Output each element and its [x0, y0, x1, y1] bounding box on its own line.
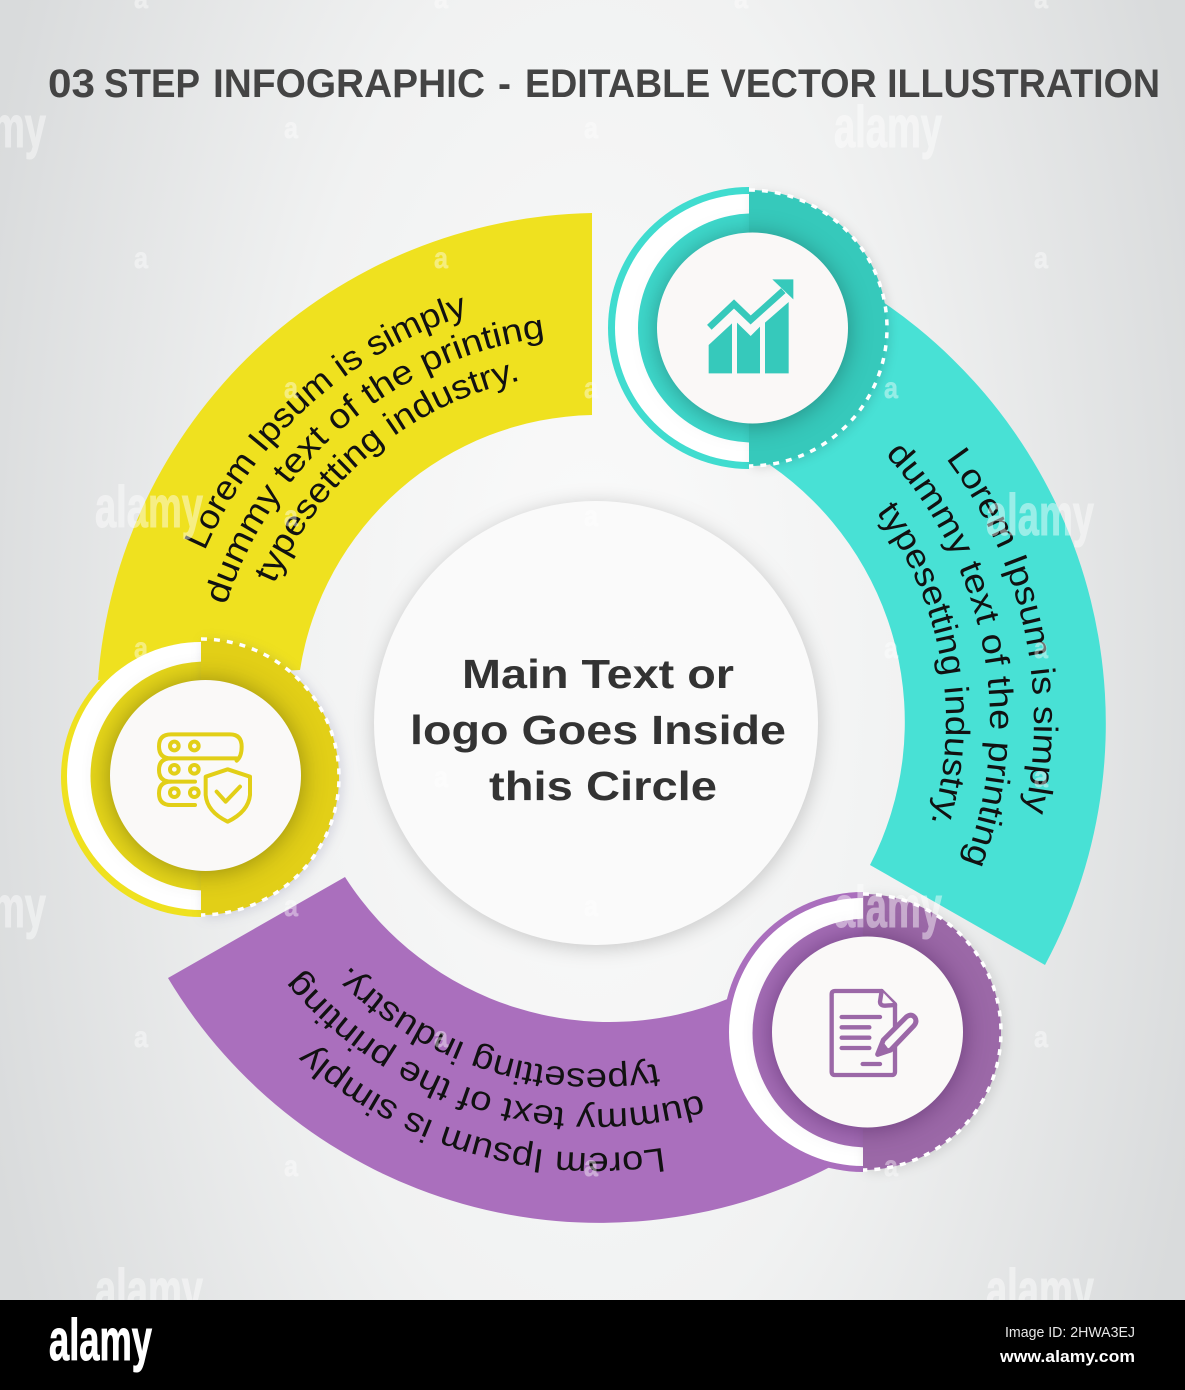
watermark grid: a	[884, 372, 898, 405]
title	[48, 62, 1160, 106]
panel: teal band: typesetting industry.	[877, 502, 970, 821]
watermark grid: a	[434, 1021, 448, 1054]
footer bar: Image ID: 2HWA3EJ	[1005, 1324, 1135, 1341]
watermark grid: a	[284, 372, 298, 405]
watermark grid: a	[1034, 761, 1048, 794]
watermark grid: alamy	[834, 875, 942, 940]
panel: yellow band: Lorem Ipsum is simply	[184, 298, 462, 548]
watermark grid: alamy	[95, 475, 203, 540]
panel: yellow band: dummy text of the printing	[208, 320, 543, 602]
panel: purple band: typesetting industry.	[342, 968, 660, 1088]
watermark grid: a	[584, 1150, 598, 1183]
watermark grid: a	[284, 890, 298, 923]
watermark grid: a	[134, 632, 148, 665]
watermark grid: a	[584, 500, 598, 533]
watermark grid: a	[884, 1150, 898, 1183]
watermark grid: alamy	[95, 1258, 203, 1323]
watermark grid: a	[584, 890, 598, 923]
watermark grid: a	[584, 112, 598, 145]
icon: server with shield	[159, 734, 250, 822]
watermark grid: a	[584, 372, 598, 405]
watermark grid: alamy	[834, 95, 942, 160]
title: INFOGRAPHIC	[213, 62, 485, 106]
watermark grid: a	[134, 1021, 148, 1054]
panel: purple band: dummy text of the printing	[288, 971, 703, 1130]
watermark grid: alamy	[540, 608, 648, 673]
panel: teal band: dummy text of the printing	[888, 446, 1014, 866]
title: STEP	[104, 62, 200, 106]
watermark grid: a	[1034, 632, 1048, 665]
badge: purple document icon	[723, 892, 1003, 1172]
watermark grid: a	[1034, 242, 1048, 275]
panel: yellow band	[98, 213, 592, 680]
panel: purple band	[168, 877, 829, 1223]
badge: yellow server icon	[61, 637, 341, 917]
panel: teal band: Lorem Ipsum is simply	[948, 447, 1058, 815]
watermark grid: a	[284, 112, 298, 145]
center circle: this Circle	[489, 763, 717, 809]
title: EDITABLE VECTOR ILLUSTRATION	[525, 62, 1160, 106]
watermark grid: a	[884, 632, 898, 665]
center circle: logo Goes Inside	[410, 707, 786, 753]
footer bar: www.alamy.com	[999, 1347, 1135, 1366]
watermark grid: a	[284, 500, 298, 533]
center circle: Main Text or	[462, 651, 734, 697]
panel: purple band: Lorem Ipsum is simply	[298, 1048, 664, 1173]
panel: yellow band: typesetting industry.	[256, 364, 518, 580]
footer bar	[0, 1300, 1185, 1390]
icon: document and pencil	[832, 991, 916, 1075]
title: -	[498, 62, 511, 106]
watermark grid: alamy	[986, 483, 1094, 548]
badge: teal chart icon	[608, 187, 890, 469]
watermark grid: a	[1034, 1021, 1048, 1054]
title: 03	[48, 62, 95, 106]
panel: teal band	[770, 303, 1106, 965]
watermark grid: a	[284, 1150, 298, 1183]
watermark grid: a	[134, 242, 148, 275]
watermark grid: a	[434, 761, 448, 794]
watermark grid: a	[434, 242, 448, 275]
center circle	[374, 501, 818, 945]
footer bar: alamy	[49, 1308, 152, 1373]
icon: growth chart	[709, 279, 793, 373]
watermark grid: alamy	[986, 1258, 1094, 1323]
